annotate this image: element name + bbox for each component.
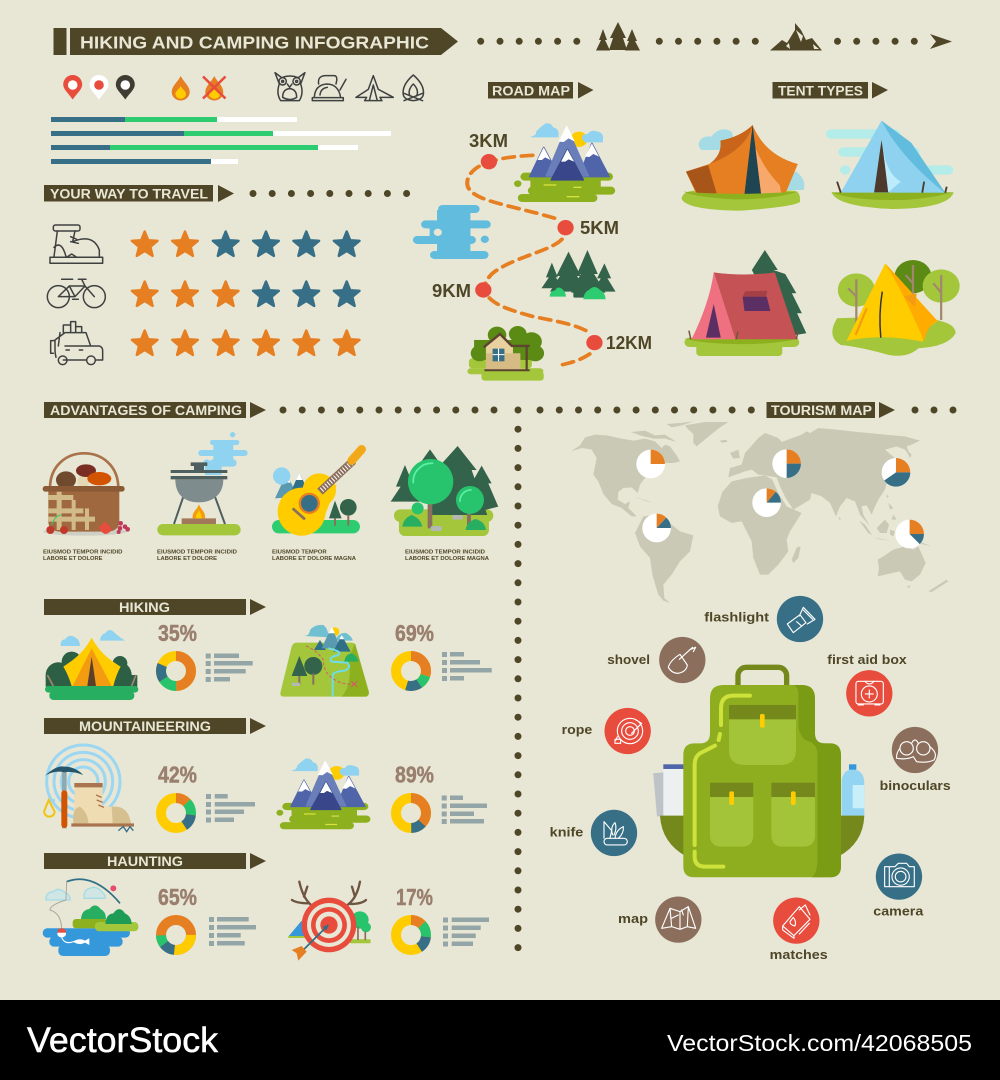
illustration: target with antlers [288,882,371,961]
gear labels: flashlight [704,610,770,625]
footer bar: VectorStock.com/42068505 [667,1030,972,1056]
icon: tent outline [356,76,393,101]
dotted dividers [280,406,956,951]
tent: red [684,250,806,356]
heading: tourism map: TOURISM MAP [771,403,872,418]
gear labels: binoculars [880,778,951,793]
heading: haunting [44,853,266,869]
heading: tourism map [766,402,895,418]
pine forest [541,250,616,299]
heading: mountaineering: MOUNTAINEERING [79,719,211,734]
stat: 35 percent [158,620,253,686]
travel icons [47,225,105,365]
cooking pot over fire [157,432,248,535]
basket of mushrooms [43,453,130,536]
gear labels: camera [873,904,924,919]
tent: orange [682,125,804,211]
world map: eastern landmasses [728,428,948,592]
advantage captions: EIUSMOD TEMPOR INCIDID [405,550,485,556]
icon: campfire flame [172,76,190,100]
hiking tent scene [45,630,138,700]
decorative header strip with trees and mountain [477,22,952,50]
gear labels: rope [562,722,592,737]
heading: road map [488,82,594,98]
advantage captions: EIUSMOD TEMPOR INCIDID [43,550,122,556]
stat: 17 percent [396,884,489,950]
stat: 35 percent: 35% [158,620,197,646]
gear labels: shovel [607,652,650,667]
road map distance labels [432,131,652,353]
road stops [475,154,603,350]
advantage captions: LABORE ET DOLORE MAGNA [405,556,489,562]
illustration: mountain scene [276,758,370,829]
stat: 65 percent: 65% [158,884,197,910]
icon: car with luggage [51,322,103,365]
forest [391,446,498,536]
heading: haunting: HAUNTING [107,854,183,869]
road map distance labels: 12KM [606,333,652,353]
cabin [467,326,544,381]
icon: knife [591,810,637,856]
icon: shovel [659,637,705,683]
dashed road path [467,155,591,366]
heading: your way to travel: YOUR WAY TO TRAVEL [50,186,208,202]
icon: kettle [312,76,346,101]
backpack [653,667,864,877]
icon: owl [275,73,305,101]
heading: road map: ROAD MAP [492,84,570,98]
advantage captions: LABORE ET DOLORE MAGNA [272,556,356,562]
heading: your way to travel [44,185,410,202]
illustration: fishing [43,879,138,956]
progress bars [51,117,391,164]
icon: folded map [655,896,701,943]
icon: matches [773,897,819,944]
stat: 89 percent: 89% [395,762,434,788]
heading: tent types: TENT TYPES [778,84,863,98]
guitar [272,449,362,536]
stat: 69 percent: 69% [395,620,434,646]
advantage captions: EIUSMOD TEMPOR [272,550,327,556]
pie charts [636,449,924,548]
gear labels: first aid box [827,652,908,667]
stat: 42 percent [158,762,255,828]
mountain scene [514,123,615,202]
heading: mountaineering [44,718,266,734]
advantage captions: LABORE ET DOLORE [43,556,103,562]
stat: 42 percent: 42% [158,762,197,788]
line icons: owl, kettle, tent, campfire [275,73,424,101]
lake [413,205,491,259]
gear labels: knife [550,825,583,840]
heading: tent types [772,82,888,98]
heading: advantages of camping: ADVANTAGES OF CAMPING [50,403,242,418]
advantages and hiking illustrations [43,432,498,700]
gear labels: map [618,911,648,926]
icon: rope [604,708,651,754]
advantage captions: EIUSMOD TEMPOR INCIDID [157,550,237,556]
icon: boot [50,225,103,263]
icon: flashlight [777,596,823,642]
title banner [54,28,458,55]
footer bar [0,1000,1000,1080]
title banner: HIKING AND CAMPING INFOGRAPHIC [80,32,429,52]
road map illustrations [413,121,960,381]
stat: 17 percent: 17% [396,884,433,910]
icon: campfire outline [403,75,424,101]
icon: binoculars [892,727,938,773]
road map distance labels: 9KM [432,281,471,301]
tent: yellow with trees [832,260,960,356]
stat: 69 percent [395,620,492,686]
gear labels: matches [770,947,828,962]
heading: hiking: HIKING [119,600,170,615]
backpack and gear icons [591,596,938,944]
icon: bicycle [47,279,105,308]
icon: camera [876,853,922,900]
tent: blue [826,121,954,209]
gear labels [550,610,951,962]
advantage captions: LABORE ET DOLORE [157,556,217,562]
heading: hiking [44,599,266,615]
map pin icons [63,75,135,100]
illustration: rope, ice axe and boot [44,745,134,832]
advantage captions [43,550,489,562]
road map distance labels: 3KM [469,131,508,151]
icon: no fire [203,76,226,100]
world map: western landmasses [571,421,802,603]
footer bar: VectorStock [27,1021,219,1060]
world map with pie charts [571,421,948,603]
star rating rows [132,232,360,355]
stat: 89 percent [395,762,487,828]
road map distance labels: 5KM [580,218,619,238]
icon: first aid box [846,670,892,716]
stat: 65 percent [158,884,256,950]
map with mountains scene [280,625,369,697]
